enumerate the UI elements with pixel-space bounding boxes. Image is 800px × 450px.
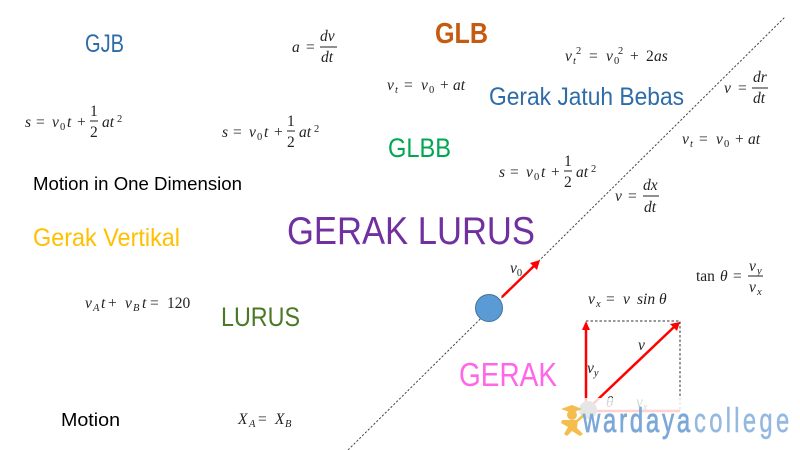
formula: s = v0 t + 1/2 at^2 (left): 0 — [60, 122, 65, 133]
watermark fade band — [556, 398, 796, 444]
heading: LURUS: LURUS — [221, 302, 300, 332]
formula: vt = v0 + at (top): = — [404, 77, 413, 94]
formula: XA = XB: B — [285, 419, 292, 430]
formula: s = v0 t + 1/2 at^2 (centre): 2 — [564, 174, 572, 191]
formula: v = dx/dt: dx — [643, 177, 658, 194]
formula: vt = v0 + at (top) — [387, 77, 466, 96]
formula: vt = v0 + at (top): v — [421, 77, 428, 94]
formula: vA t + vB t = 120: t — [101, 295, 106, 312]
title: GERAK LURUS: GERAK LURUS — [287, 210, 535, 253]
formula: vt^2 = v0^2 + 2as: 2 — [576, 46, 581, 57]
heading: GERAK: GERAK — [459, 356, 557, 393]
formula: vA t + vB t = 120: = — [150, 295, 159, 312]
formula: v = dx/dt — [615, 177, 659, 216]
formula: XA = XB: A — [248, 419, 256, 430]
formula: vt = v0 + at (right): v — [716, 131, 723, 148]
watermark logo: wardayacollege — [561, 402, 789, 440]
formula: s = v0 t + 1/2 at^2 (left) — [25, 103, 122, 141]
formula: s = v0 t + 1/2 at^2 (middle): = — [233, 124, 242, 141]
formula: s = v0 t + 1/2 at^2 (middle): 2 — [287, 134, 295, 151]
formula: s = v0 t + 1/2 at^2 (middle): v — [249, 124, 256, 141]
formula: tan theta = vy/vx: = — [733, 268, 742, 285]
formula: vA t + vB t = 120: v — [125, 295, 132, 312]
formula: s = v0 t + 1/2 at^2 (middle): 2 — [314, 124, 319, 135]
formula: a = dv/dt: a — [292, 39, 300, 56]
formula: s = v0 t + 1/2 at^2 (middle): t — [264, 124, 269, 141]
formula: s = v0 t + 1/2 at^2 (left): v — [52, 114, 59, 131]
formula: vt^2 = v0^2 + 2as: 2 — [618, 46, 623, 57]
formula: vA t + vB t = 120: B — [133, 303, 140, 314]
heading: Gerak Vertikal: Gerak Vertikal — [33, 224, 180, 252]
vector decomposition diagram: x — [642, 402, 648, 413]
formula: s = v0 t + 1/2 at^2 (centre): 1 — [564, 153, 572, 170]
logo text: wardaya — [582, 402, 691, 440]
formula: v = dr/dt: dr — [753, 69, 768, 86]
formula: s = v0 t + 1/2 at^2 (centre): 0 — [534, 172, 539, 183]
formula: v = dr/dt: v — [724, 80, 731, 97]
heading: Gerak Jatuh Bebas: Gerak Jatuh Bebas — [489, 83, 684, 111]
formula: XA = XB — [237, 411, 292, 430]
formula: s = v0 t + 1/2 at^2 (middle): at — [299, 124, 312, 141]
formula: vt = v0 + at (top): t — [395, 85, 399, 96]
formula: vt^2 = v0^2 + 2as: t — [573, 56, 577, 67]
formula: s = v0 t + 1/2 at^2 (left): = — [36, 114, 45, 131]
formula: a = dv/dt — [292, 28, 337, 66]
formula: vA t + vB t = 120: t — [142, 295, 147, 312]
vector decomposition diagram: v — [587, 360, 594, 377]
formula: v = dr/dt: = — [738, 80, 747, 97]
heading: GLBB: GLBB — [388, 133, 451, 163]
formula: s = v0 t + 1/2 at^2 (left): 2 — [90, 124, 98, 141]
formula: vA t + vB t = 120: 120 — [167, 295, 190, 312]
formula: a = dv/dt: dt — [321, 49, 334, 66]
formula: vt^2 = v0^2 + 2as — [565, 46, 668, 67]
heading: GJB: GJB — [85, 30, 124, 58]
formula: s = v0 t + 1/2 at^2 (centre): + — [551, 164, 560, 181]
formula: vx = v sin theta: x — [595, 299, 601, 310]
vector decomposition diagram: θ — [606, 394, 614, 411]
formula: vt^2 = v0^2 + 2as: 0 — [614, 56, 619, 67]
formula: XA = XB: X — [274, 411, 285, 428]
formula: XA = XB: X — [237, 411, 248, 428]
logo text — [582, 402, 789, 440]
dashed diagonal line — [348, 17, 785, 450]
formula: tan theta = vy/vx: tan — [696, 268, 715, 285]
icon: graduate figure — [561, 405, 584, 436]
formula: vA t + vB t = 120 — [85, 295, 190, 314]
formula: s = v0 t + 1/2 at^2 (centre): at — [576, 164, 589, 181]
formula: vx = v sin theta — [588, 291, 667, 310]
formula: vt^2 = v0^2 + 2as: as — [654, 48, 668, 65]
formula: s = v0 t + 1/2 at^2 (left): 2 — [117, 114, 122, 125]
formula: s = v0 t + 1/2 at^2 (left): 1 — [90, 103, 98, 120]
formula: vx = v sin theta: = — [606, 291, 615, 308]
formula: vt = v0 + at (top): 0 — [429, 85, 434, 96]
formula: vt^2 = v0^2 + 2as: 2 — [646, 48, 654, 65]
vector decomposition diagram: y — [593, 368, 599, 379]
formula: s = v0 t + 1/2 at^2 (centre) — [499, 153, 596, 191]
formula: s = v0 t + 1/2 at^2 (left): at — [102, 114, 115, 131]
formula: vt = v0 + at (right): at — [748, 131, 761, 148]
formula: v = dx/dt: = — [628, 188, 637, 205]
formula: vt = v0 + at (top): v — [387, 77, 394, 94]
formula: vt = v0 + at (right) — [682, 131, 761, 150]
formula: XA = XB: = — [258, 411, 267, 428]
formula: vt = v0 + at (right): v — [682, 131, 689, 148]
formula: vt = v0 + at (top): at — [453, 77, 466, 94]
formula: s = v0 t + 1/2 at^2 (middle): 1 — [287, 113, 295, 130]
formula: vt^2 = v0^2 + 2as: + — [630, 48, 639, 65]
formula: a = dv/dt: = — [306, 39, 315, 56]
formula: tan theta = vy/vx: x — [756, 287, 762, 298]
formula: vt = v0 + at (right): t — [690, 139, 694, 150]
formula: s = v0 t + 1/2 at^2 (middle) — [222, 113, 319, 151]
formula: v = dx/dt: v — [615, 188, 622, 205]
heading: GLB: GLB — [435, 18, 488, 50]
formula: vA t + vB t = 120: A — [92, 303, 100, 314]
formula: tan theta = vy/vx: v — [749, 258, 756, 275]
vector decomposition diagram: v — [636, 394, 643, 411]
ball with initial velocity: v — [510, 260, 517, 277]
formula: s = v0 t + 1/2 at^2 (middle): + — [274, 124, 283, 141]
formula: vA t + vB t = 120: v — [85, 295, 92, 312]
formula: v = dr/dt — [724, 69, 768, 107]
formula: vx = v sin theta: v — [623, 291, 630, 308]
formula: vA t + vB t = 120: + — [108, 295, 117, 312]
text: Motion: Motion — [61, 410, 120, 430]
formula: v = dr/dt: dt — [753, 90, 766, 107]
formula: s = v0 t + 1/2 at^2 (left): + — [77, 114, 86, 131]
formula: tan theta = vy/vx — [696, 258, 763, 298]
formula: vt = v0 + at (right): = — [699, 131, 708, 148]
formula: s = v0 t + 1/2 at^2 (centre): t — [541, 164, 546, 181]
formula: vx = v sin theta: v — [588, 291, 595, 308]
formula: vt = v0 + at (right): + — [735, 131, 744, 148]
formula: s = v0 t + 1/2 at^2 (middle): s — [222, 124, 228, 141]
formula: vt = v0 + at (top): + — [440, 77, 449, 94]
formula: s = v0 t + 1/2 at^2 (centre): s — [499, 164, 505, 181]
ball with initial velocity — [476, 260, 540, 322]
vector decomposition diagram: v — [638, 337, 645, 354]
formula: vx = v sin theta: sin θ — [637, 291, 667, 308]
formula: tan theta = vy/vx: v — [749, 279, 756, 296]
formula: a = dv/dt: dv — [320, 28, 335, 45]
text: Motion in One Dimension: Motion in One Dimension — [33, 174, 242, 194]
formula: vt = v0 + at (right): 0 — [724, 139, 729, 150]
formula: s = v0 t + 1/2 at^2 (centre): 2 — [591, 164, 596, 175]
formula: s = v0 t + 1/2 at^2 (middle): 0 — [257, 132, 262, 143]
formula: s = v0 t + 1/2 at^2 (centre): v — [526, 164, 533, 181]
formula: vt^2 = v0^2 + 2as: v — [606, 48, 613, 65]
formula: v = dx/dt: dt — [644, 199, 657, 216]
vector decomposition diagram — [579, 321, 680, 419]
formula: s = v0 t + 1/2 at^2 (left): t — [67, 114, 72, 131]
formula: vt^2 = v0^2 + 2as: v — [565, 48, 572, 65]
formula: s = v0 t + 1/2 at^2 (centre): = — [510, 164, 519, 181]
formula: tan theta = vy/vx: y — [756, 266, 762, 277]
logo text: college — [694, 402, 789, 440]
ball with initial velocity: 0 — [517, 268, 522, 279]
formula: vt^2 = v0^2 + 2as: = — [589, 48, 598, 65]
formula: tan theta = vy/vx: θ — [720, 268, 728, 285]
formula: s = v0 t + 1/2 at^2 (left): s — [25, 114, 31, 131]
